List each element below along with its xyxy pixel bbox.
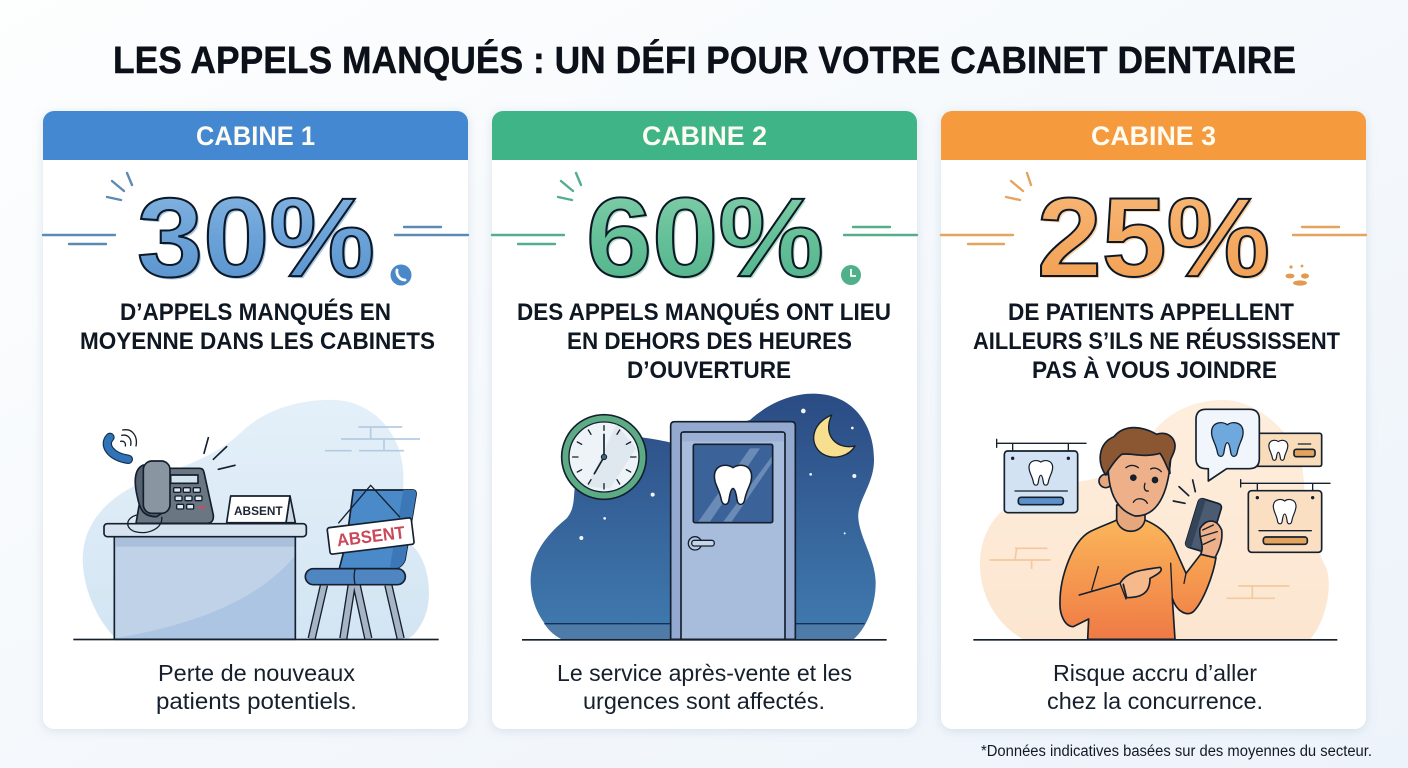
desk phone [128, 461, 213, 533]
door [671, 422, 795, 639]
header: cabine 1 [43, 111, 468, 160]
heading: cabine 3: AILLEURS S’ILS NE RÉUSSISSENT [973, 327, 1340, 355]
desk [104, 524, 306, 639]
heading: cabine 3: PAS À VOUS JOINDRE [1032, 356, 1277, 384]
icon: ringing handset [107, 430, 136, 459]
body text: cabine 3: Risque accru d’aller [1053, 660, 1257, 686]
statistic: 25%: 25% [1039, 177, 1272, 302]
speech bubble with tooth [1196, 409, 1259, 481]
footnote: *Données indicatives basées sur des moyennes du secteur. [981, 743, 1372, 760]
body text: cabine 2: Le service après-vente et les [557, 660, 852, 686]
heading: cabine 3: DE PATIENTS APPELLENT [1008, 299, 1294, 326]
right sign [1241, 480, 1330, 552]
heading: cabine 3 [973, 299, 1340, 384]
decorative lines and sparks: 60% [492, 173, 917, 244]
heading: cabine 2: DES APPELS MANQUÉS ONT LIEU [517, 298, 891, 326]
hanging sign: absent: ABSENT [336, 522, 406, 550]
phone in hand [1185, 498, 1222, 553]
body text: cabine 3: chez la concurrence. [1047, 688, 1263, 714]
hanging sign: absent [327, 485, 414, 554]
pointing hand [1079, 567, 1161, 598]
body text: cabine 2 [557, 660, 852, 714]
left sign [997, 439, 1086, 513]
illustration: empty reception desk [73, 400, 439, 640]
header: cabine 3 [941, 111, 1366, 160]
statistic: 30%: 30% [137, 175, 375, 300]
heading: cabine 1: MOYENNE DANS LES CABINETS [80, 328, 435, 355]
panel: cabine 3 [941, 111, 1366, 729]
desk sign: absent [227, 496, 295, 523]
heading: cabine 1: D’APPELS MANQUÉS EN [120, 298, 391, 326]
heading: cabine 2: EN DEHORS DES HEURES [567, 328, 852, 355]
illustration: closed door at night [522, 394, 887, 641]
header: cabine 1: CABINE 1 [196, 121, 315, 151]
stars [579, 409, 856, 540]
statistic: 25%: 25% [1037, 175, 1270, 300]
header: cabine 3: CABINE 3 [1091, 121, 1216, 151]
heading: cabine 2: D’OUVERTURE [627, 357, 791, 384]
icon: clock badge [841, 265, 861, 285]
clock [562, 415, 646, 499]
statistic: 60%: 60% [586, 175, 824, 300]
illustration: patient looking elsewhere [973, 400, 1337, 641]
body text: cabine 2: urgences sont affectés. [583, 688, 825, 714]
heading: cabine 2 [517, 298, 891, 384]
moon [814, 415, 855, 457]
person [1060, 428, 1222, 639]
body text: cabine 1: patients potentiels. [156, 688, 357, 714]
title: LES APPELS MANQUÉS : UN DÉFI POUR VOTRE CABINET DENTAIRE [113, 38, 1296, 82]
icon: phone badge [390, 264, 412, 286]
body text: cabine 1: Perte de nouveaux [158, 660, 356, 686]
panel: cabine 1 [43, 111, 468, 729]
chair [305, 490, 416, 639]
header: cabine 2 [492, 111, 917, 160]
body text: cabine 3 [1047, 660, 1263, 714]
header: cabine 2: CABINE 2 [642, 121, 767, 151]
body text: cabine 1 [156, 660, 357, 714]
panel: cabine 2 [492, 111, 917, 729]
small card [1247, 433, 1322, 466]
desk sign: absent: ABSENT [234, 504, 283, 518]
statistic: 30%: 30% [139, 177, 377, 302]
decorative lines and sparks: 30% [43, 173, 468, 244]
decorative lines and sparks: 25% [941, 173, 1366, 244]
statistic: 60%: 60% [588, 177, 826, 302]
heading: cabine 1 [80, 298, 435, 355]
icon: sad badge [1286, 265, 1309, 286]
neck and head [1117, 505, 1145, 531]
